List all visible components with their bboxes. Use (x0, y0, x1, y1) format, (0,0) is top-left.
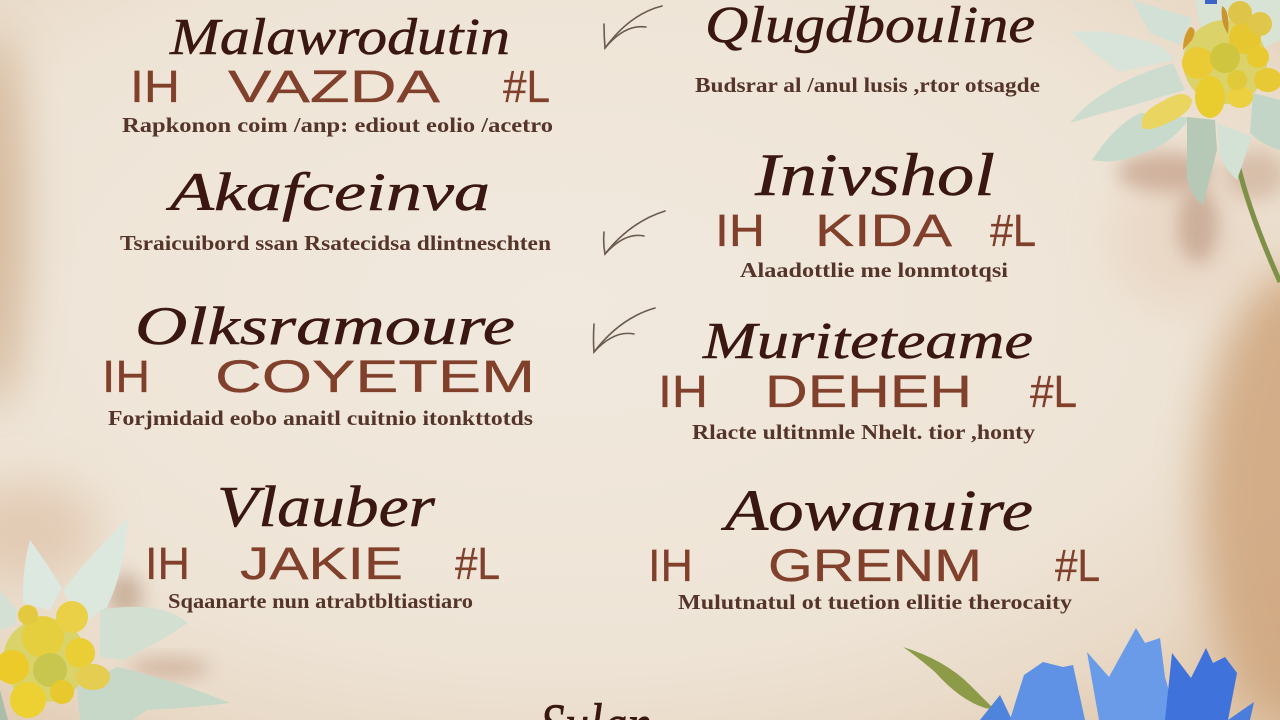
subtitle row: II COYETEM: IH (102, 351, 150, 402)
subtitle row: II GRENM #L: GRENM (768, 540, 982, 591)
subtitle row: II JAKIE #L: #L (455, 538, 500, 589)
subtitle row: II VAZDA #L: VAZDA (228, 61, 440, 112)
subtitle row: II DEHEH #L (658, 366, 1077, 417)
subtitle row: II GRENM #L (648, 540, 1100, 591)
subtitle row: II DEHEH #L: IH (658, 366, 708, 417)
heading: Muriteteame: Muriteteame (702, 313, 1033, 370)
caption: Sqaanarte nun atrabtbltiastiaro (168, 589, 473, 613)
icon: check mark 2 (604, 211, 665, 254)
icon: check mark 3 (594, 308, 655, 352)
subtitle row: II COYETEM: COYETEM (215, 351, 535, 402)
caption: Budsrar al /anul lusis ,rtor otsagde (695, 73, 1040, 97)
caption: Tsraicuibord ssan Rsatecidsa dlintneschten (120, 231, 551, 255)
flower: blue cornflower bottom right (903, 628, 1254, 720)
subtitle row: II KIDA #L (715, 205, 1036, 256)
caption: Alaadottlie me lonmtotqsi (740, 258, 1008, 282)
subtitle row: II VAZDA #L: IH (130, 61, 180, 112)
subtitle row: II JAKIE #L: IH (145, 538, 190, 589)
heading: Vlauber: Vlauber (217, 474, 435, 539)
subtitle row: II DEHEH #L: DEHEH (765, 366, 972, 417)
subtitle row: II GRENM #L: IH (648, 540, 693, 591)
icon: check mark 1 (604, 6, 662, 48)
flower: edelweiss top right (1070, 0, 1280, 282)
subtitle row: II VAZDA #L: #L (503, 61, 550, 112)
heading: Aowanuire: Aowanuire (720, 478, 1033, 543)
subtitle row: II DEHEH #L: #L (1030, 366, 1077, 417)
subtitle row: II JAKIE #L (145, 538, 500, 589)
subtitle row: II VAZDA #L (130, 61, 550, 112)
subtitle row: II COYETEM (102, 351, 535, 402)
subtitle row: II GRENM #L: #L (1055, 540, 1100, 591)
subtitle row: II JAKIE #L: JAKIE (240, 538, 403, 589)
flower: edelweiss bottom left (0, 518, 230, 720)
caption: Forjmidaid eobo anaitl cuitnio itonkttotds (108, 406, 533, 430)
caption: Mulutnatul ot tuetion ellitie therocaity (678, 590, 1073, 614)
caption: Rlacte ultitnmle Nhelt. tior ,honty (692, 420, 1036, 444)
subtitle row: II KIDA #L: #L (990, 205, 1036, 256)
subtitle row: II KIDA #L: IH (715, 205, 765, 256)
heading: Akafceinva: Akafceinva (166, 162, 490, 222)
caption: Rapkonon coim /anp: ediout eolio /acetro (122, 113, 553, 137)
subtitle row: II KIDA #L: KIDA (815, 205, 952, 256)
heading: Inivshol: Inivshol (754, 142, 995, 208)
heading: Malawrodutin: Malawrodutin (169, 9, 510, 66)
heading: Olksramoure: Olksramoure (135, 296, 515, 356)
